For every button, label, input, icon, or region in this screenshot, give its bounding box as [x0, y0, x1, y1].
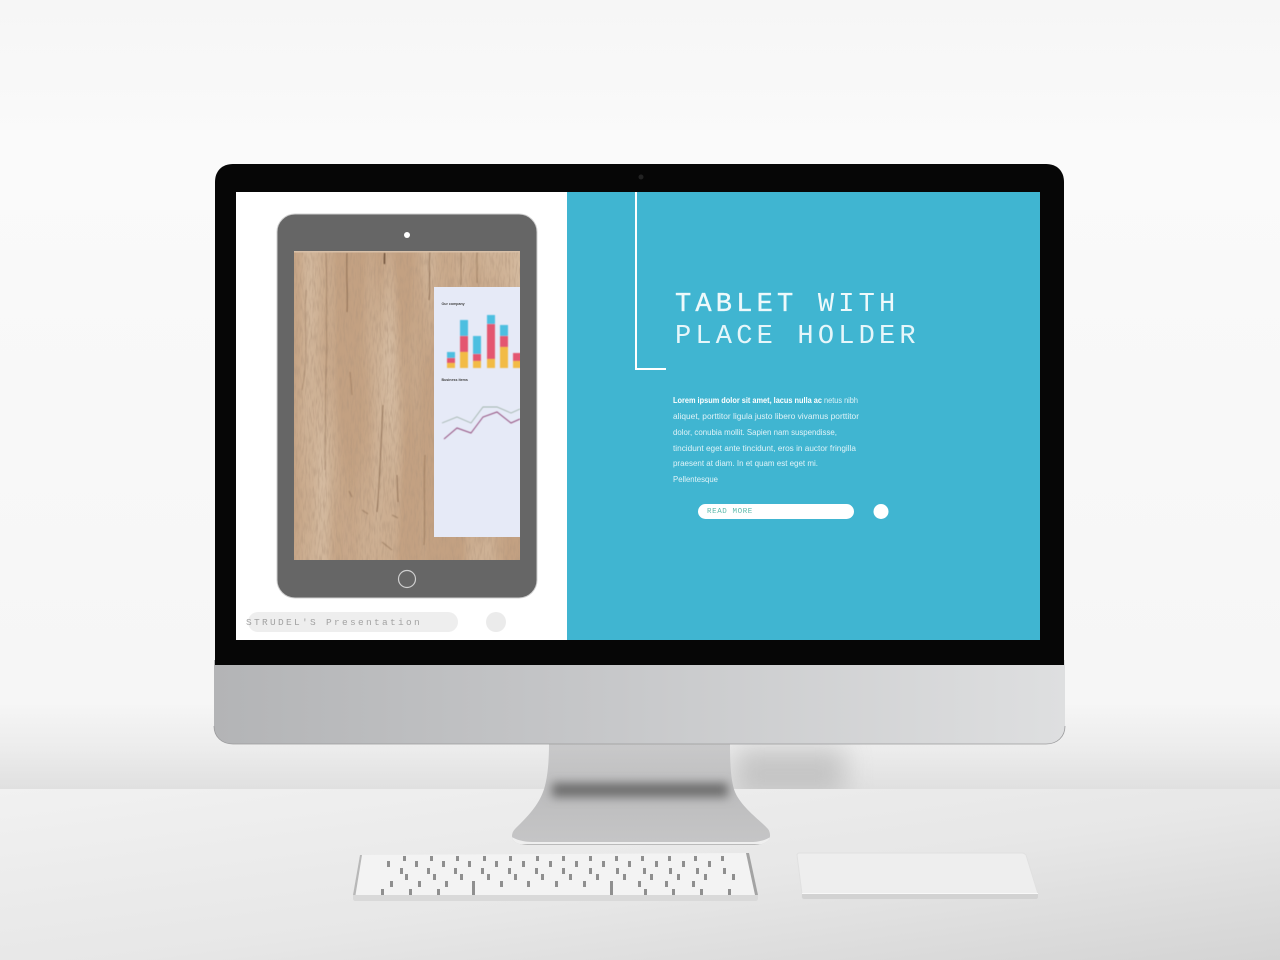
monitor chin [214, 660, 1065, 744]
footer label pill: STRUDEL'S Presentation [246, 617, 422, 628]
monitor stand [505, 744, 775, 846]
body text: praesent at diam. In et quam est eget mi. [673, 458, 818, 468]
body text [673, 395, 859, 484]
body text: Pellentesque [673, 474, 718, 484]
read more button: READ MORE [707, 508, 753, 516]
trackpad [797, 853, 1038, 899]
footer dot [486, 612, 506, 632]
monitor body [214, 164, 1065, 744]
monitor webcam [638, 174, 644, 180]
tablet home button [398, 570, 416, 588]
tablet device [277, 214, 537, 598]
tablet photo: wood desk with paper report [294, 251, 524, 560]
wood texture [294, 251, 520, 560]
title: TABLET WITH [675, 290, 899, 320]
body text: Lorem ipsum dolor sit amet, lacus nulla ac netus nibh [673, 395, 858, 405]
stand shadow band [552, 783, 728, 797]
body text: aliquet, porttitor ligula justo libero vivamus porttitor [673, 411, 859, 421]
slide screen [236, 192, 1040, 640]
body text: tincidunt eget ante tincidunt, eros in auctor fringilla [673, 443, 856, 453]
footer label pill [246, 612, 458, 632]
read more button [698, 504, 854, 519]
keyboard body [353, 853, 758, 901]
stand foot rim [512, 837, 770, 844]
paper report [434, 287, 524, 537]
stacked bar chart [447, 315, 521, 368]
paper heading: business items: Business items [442, 378, 468, 382]
left white panel [236, 192, 567, 640]
keyboard [353, 853, 758, 901]
monitor black bezel [215, 164, 1064, 665]
decorative corner line [636, 192, 666, 369]
paper heading: our company: Our company [442, 302, 465, 306]
button dot [874, 504, 888, 519]
title second line: PLACE HOLDER [675, 322, 920, 352]
keyboard key gaps [381, 856, 735, 895]
right blue panel [567, 192, 1040, 640]
tablet body [277, 214, 537, 598]
body text: dolor, conubia mollit. Sapien nam suspendisse, [673, 427, 837, 437]
tablet camera [404, 232, 410, 238]
line chart [442, 407, 520, 439]
